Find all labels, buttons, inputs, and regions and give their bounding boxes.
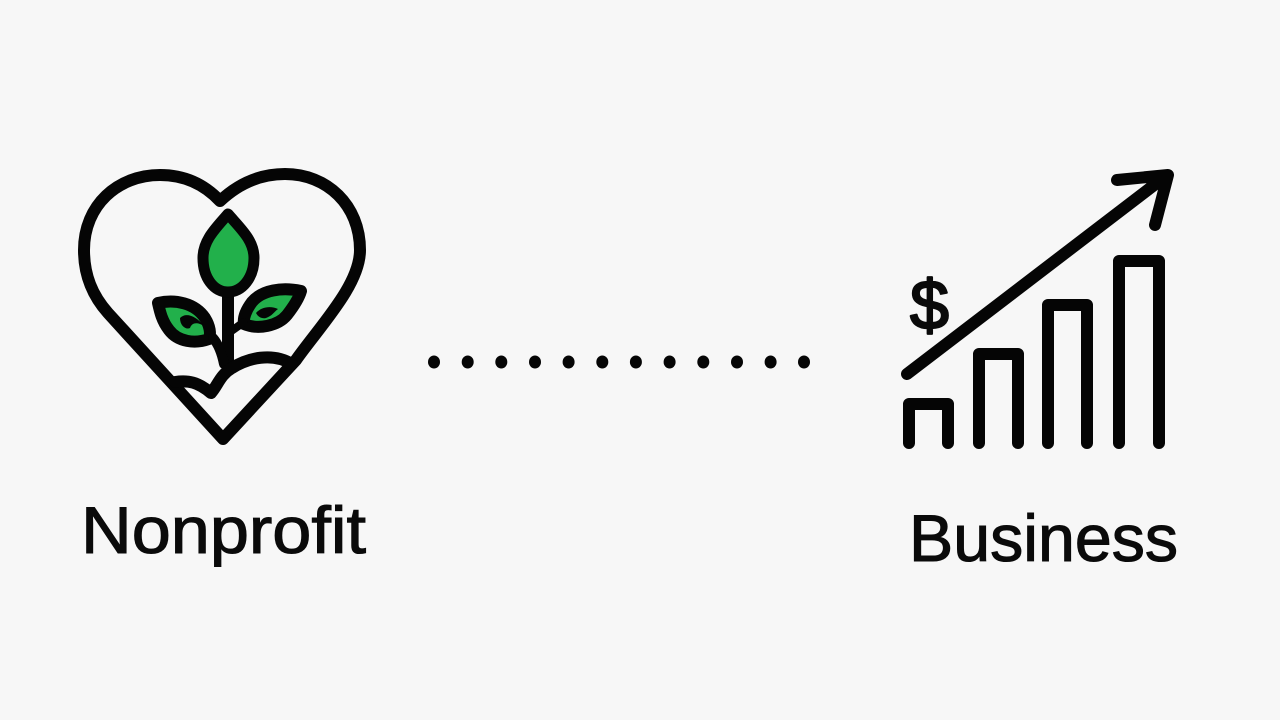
- bar 4: [1119, 261, 1159, 443]
- left leaf: [158, 302, 224, 364]
- soil hills: [175, 357, 292, 393]
- right leaf: [230, 289, 301, 332]
- icon: heart with growing plant: [84, 174, 360, 439]
- plant stem: [222, 292, 234, 366]
- growth arrow: [907, 175, 1168, 374]
- top leaf: [203, 214, 254, 292]
- icon: business growth chart: [907, 175, 1168, 443]
- heart outline: [84, 174, 360, 439]
- connector: dotted line: [428, 356, 810, 368]
- bar 2: [979, 354, 1018, 443]
- label: Business: Business: [909, 501, 1178, 575]
- dollar sign: $: [910, 266, 949, 344]
- bar 3: [1048, 305, 1087, 443]
- bar 1: [909, 404, 948, 443]
- label: Nonprofit: Nonprofit: [81, 493, 366, 567]
